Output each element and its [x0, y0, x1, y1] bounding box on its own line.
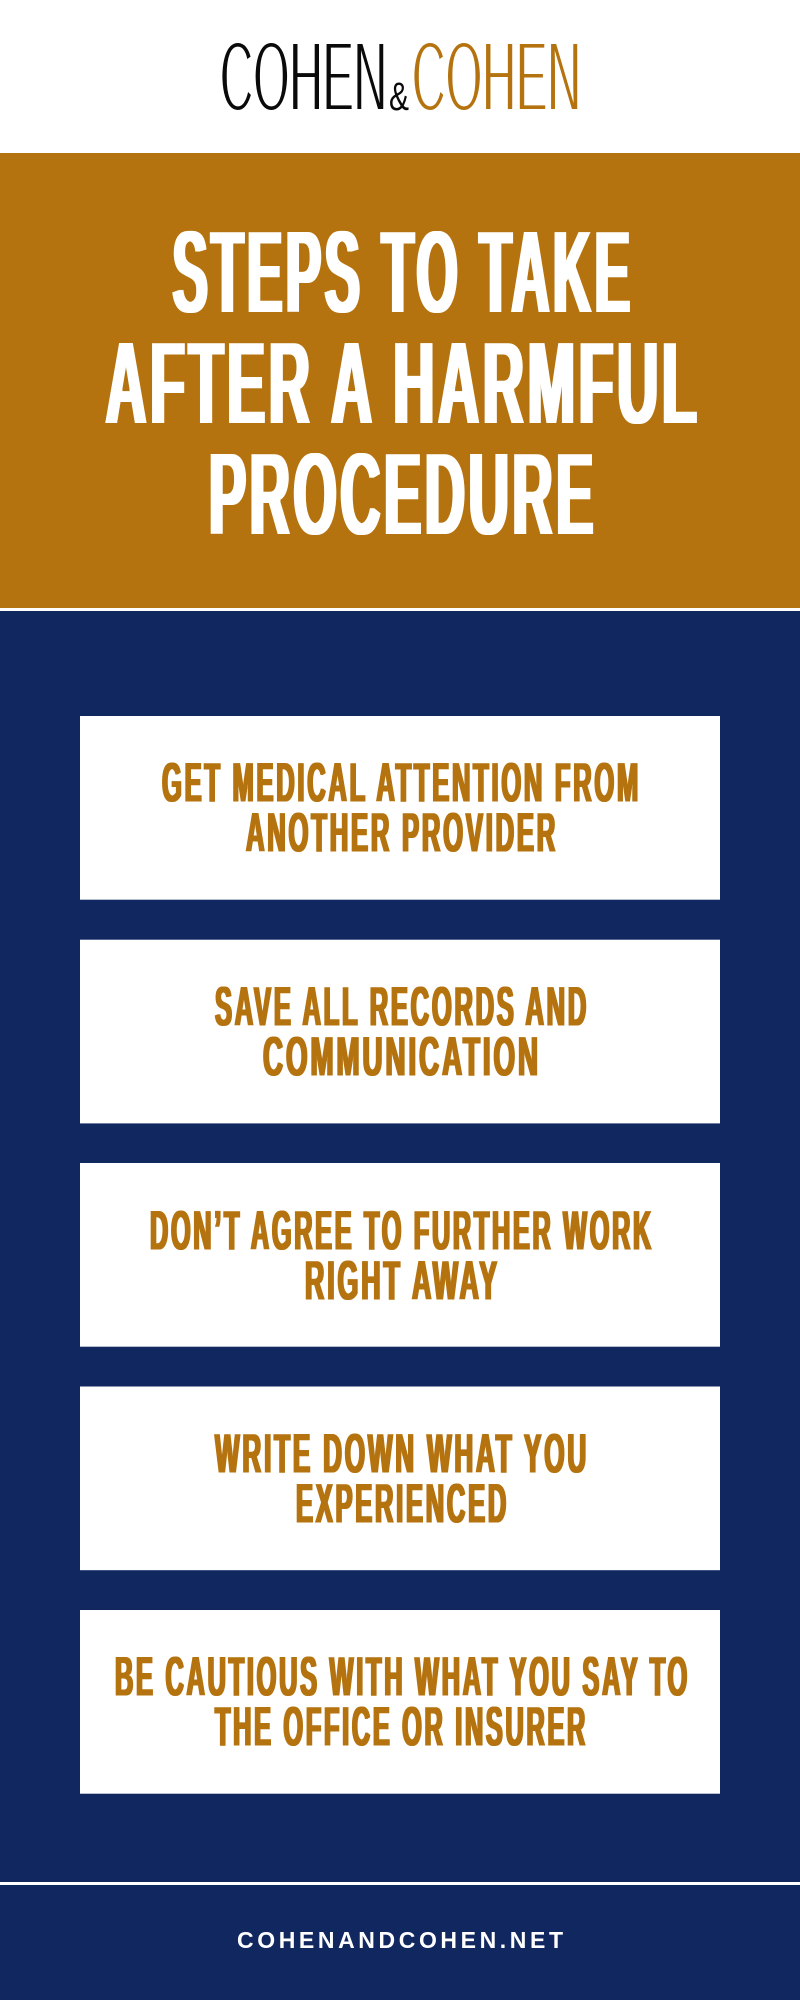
logo: Cohen & Cohen: COHEN: [220, 21, 387, 133]
step card 4: EXPERIENCED: [296, 1472, 509, 1534]
step card 2: [80, 940, 720, 1123]
step card 3: RIGHT AWAY: [305, 1248, 500, 1312]
step card 1: [80, 716, 720, 900]
title text: [106, 206, 700, 561]
header with logo: COHEN: [412, 21, 581, 133]
step card 5: [80, 1610, 720, 1794]
title banner: [0, 153, 800, 611]
step card 3: [80, 1163, 720, 1347]
logo: Cohen & Cohen: &: [389, 75, 409, 119]
step card 4: [80, 1386, 720, 1570]
footer: [0, 1882, 800, 1953]
footer website: COHENANDCOHEN.NET: [237, 1927, 563, 1953]
header with logo: [0, 0, 800, 153]
